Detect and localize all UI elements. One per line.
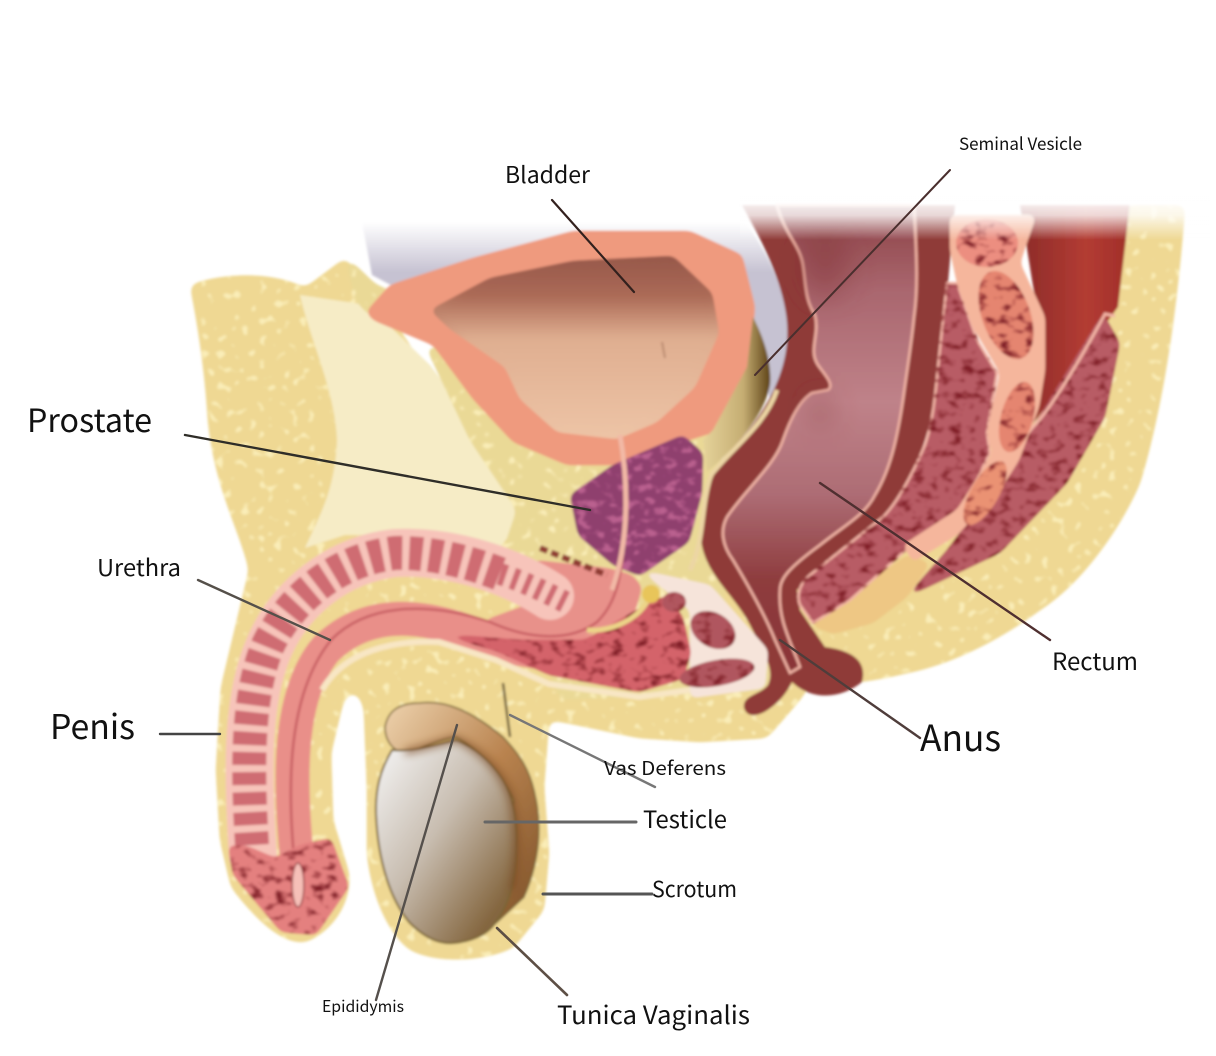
- pale cream pelvic space: [300, 295, 520, 548]
- label: Prostate: Prostate: [27, 396, 152, 442]
- anal canal gold tissue: [810, 555, 930, 634]
- line: epididymis: [376, 725, 457, 1000]
- prostatic urethra pale: [612, 435, 626, 590]
- label: Seminal Vesicle: Seminal Vesicle: [959, 130, 1082, 155]
- label: Bladder: Bladder: [505, 156, 590, 190]
- muscle ovals: [662, 592, 757, 692]
- leader lines: [160, 170, 1050, 1000]
- anatomy illustration: [190, 205, 1185, 959]
- line: urethra: [198, 580, 330, 640]
- label: Scrotum: Scrotum: [652, 872, 737, 904]
- line: seminal vesicle: [755, 170, 950, 375]
- line: rectum: [820, 483, 1050, 640]
- label: Rectum: Rectum: [1052, 642, 1138, 677]
- rectal wall: [701, 205, 955, 715]
- seminal vesicle: [703, 317, 770, 472]
- lilac peritoneal band: [362, 222, 787, 400]
- urethra: [291, 440, 625, 880]
- vas deferens: [503, 683, 510, 737]
- fat apex above bladder: [345, 255, 395, 318]
- label: Penis: Penis: [50, 700, 135, 749]
- right body fat: [780, 205, 1185, 684]
- line: prostate: [185, 435, 590, 510]
- pelvic cavity: [723, 205, 917, 673]
- label: Epididymis: Epididymis: [322, 993, 404, 1017]
- fat around bladder and prostate: [425, 345, 790, 700]
- bowel contents segments: [955, 219, 1044, 531]
- top white fade: [740, 195, 1210, 240]
- left body fat with penis and scrotum skin: [190, 258, 820, 959]
- line: testicle: [485, 820, 636, 824]
- glans: [228, 838, 349, 935]
- urethral opening: [292, 863, 304, 907]
- testicle: [376, 740, 517, 943]
- dotted sphincter: [540, 548, 607, 575]
- label: Testicle: Testicle: [643, 800, 727, 835]
- pale lower outline of penis: [322, 642, 690, 697]
- line: anus: [780, 640, 920, 738]
- levator muscle: [905, 313, 1120, 598]
- bulbourethral gland: [642, 585, 660, 603]
- line: scrotum: [543, 892, 652, 896]
- corpus spongiosum band: [292, 619, 610, 870]
- bulb of penis: [435, 595, 691, 692]
- red back muscle: [1020, 205, 1130, 432]
- label: Anus: Anus: [920, 710, 1001, 762]
- gland tail: [587, 596, 650, 630]
- label: Vas Deferens: Vas Deferens: [604, 754, 726, 781]
- bladder interior: [430, 256, 719, 439]
- brown shadow over testicle: [405, 739, 516, 890]
- line: penis: [160, 733, 220, 735]
- rectal muscle wall: [798, 283, 997, 623]
- line: bladder: [552, 200, 634, 292]
- tan fascia line: [690, 390, 777, 570]
- line: tunica vaginalis: [497, 928, 567, 995]
- corpus cavernosum stripes: [249, 553, 500, 845]
- label: Urethra: Urethra: [97, 549, 181, 583]
- bladder interior mark: [662, 342, 665, 358]
- pink tissue at bulb: [480, 560, 642, 642]
- line: vas deferens: [510, 715, 655, 787]
- bladder wall: [366, 231, 755, 465]
- cavity dark patches: [801, 229, 849, 426]
- prostate: [570, 435, 703, 576]
- perineal pale background: [640, 570, 768, 698]
- label: Tunica Vaginalis: Tunica Vaginalis: [557, 996, 750, 1032]
- epididymis and tunica: [385, 702, 539, 923]
- pale outer corpus band: [250, 553, 550, 855]
- bowel lumen outline: [903, 215, 1045, 562]
